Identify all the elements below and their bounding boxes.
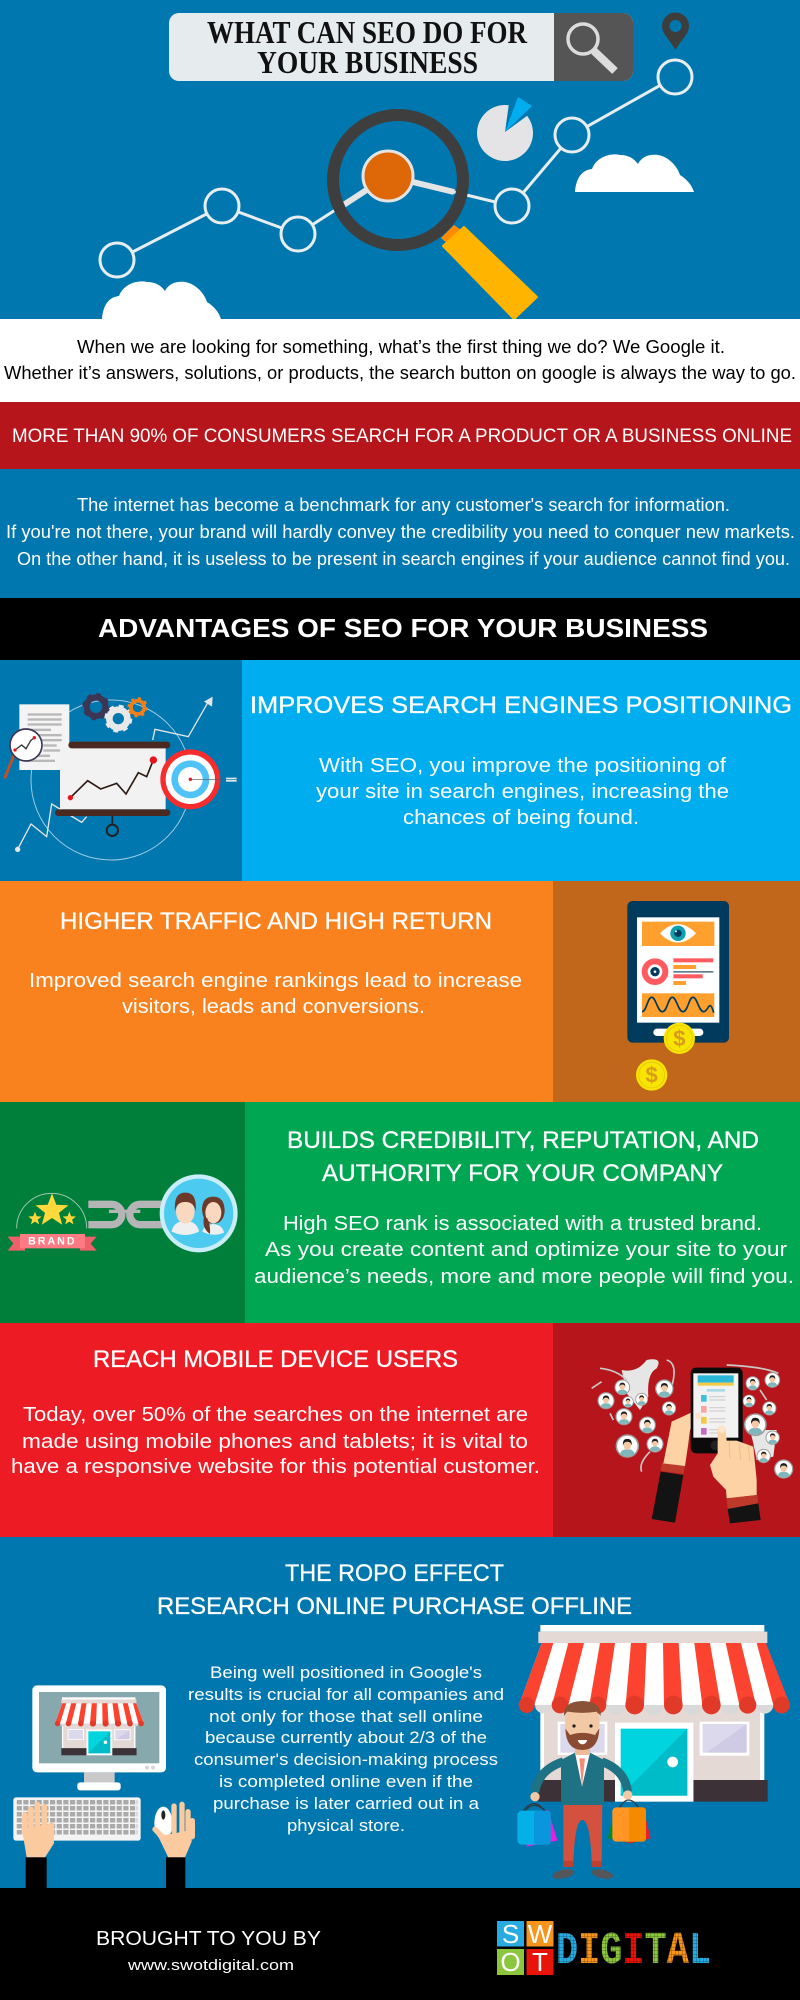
icon: pie chart (477, 96, 535, 161)
logo: SWOT Digital: W (528, 1919, 553, 1949)
icon: hands holding phone with user network (592, 1359, 793, 1523)
heading: ROPO effect: THE ROPO EFFECT (285, 1560, 504, 1587)
text: brought to you by: www.swotdigital.com (127, 1957, 294, 1974)
title: YOUR BUSINESS (257, 44, 478, 80)
logo: SWOT Digital: S (502, 1919, 519, 1949)
text block: traffic: Improved search engine rankings lead to increase (29, 970, 522, 992)
text block: traffic: visitors, leads and conversions. (122, 996, 425, 1018)
panel: ROPO effect (0, 1537, 800, 1888)
text block: credibility: audience’s needs, more and more people will find you. (254, 1266, 794, 1288)
text block: ROPO: not only for those that sell online (209, 1707, 483, 1726)
text block: ROPO: results is crucial for all companies and (188, 1685, 504, 1704)
text block: ROPO (188, 1663, 504, 1835)
text block: credibility: As you create content and optimize your site to your (265, 1239, 787, 1261)
icon: storefront (517, 1625, 790, 1881)
text block: mobile (11, 1404, 540, 1478)
text block: positioning: your site in search engines, increasing the (316, 781, 729, 803)
text block: mobile: have a responsive website for this potential customer. (11, 1456, 540, 1478)
panel: blue credibility text (0, 469, 800, 598)
panel: higher traffic (0, 881, 800, 1102)
heading: builds credibility: AUTHORITY FOR YOUR COMPANY (322, 1160, 723, 1187)
heading: higher traffic and high return: HIGHER TRAFFIC AND HIGH RETURN (60, 908, 492, 935)
heading: reach mobile device users: REACH MOBILE DEVICE USERS (93, 1346, 458, 1373)
icon: clouds (102, 154, 694, 319)
panel: intro text: Whether it’s answers, solutions, or products, the search button on google is always the way to go. (4, 363, 796, 383)
title: WHAT CAN SEO DO FOR (207, 14, 528, 50)
icon: brand chain to people: BRAND (28, 1236, 77, 1248)
panel: reach mobile users (0, 1323, 800, 1537)
text block: positioning (316, 755, 729, 829)
text block: mobile: made using mobile phones and tablets; it is vital to (22, 1431, 528, 1453)
text: brought to you by (96, 1928, 321, 1974)
heading: improves search engines positioning: IMPROVES SEARCH ENGINES POSITIONING (250, 692, 792, 719)
text block: positioning: With SEO, you improve the positioning of (319, 755, 726, 777)
logo: SWOT Digital: O (500, 1947, 521, 1977)
icon: computer with online store and hands (13, 1685, 192, 1888)
heading: builds credibility (287, 1127, 759, 1187)
text block: credibility (254, 1213, 794, 1288)
text block: ROPO: physical store. (287, 1816, 405, 1835)
panel: blue credibility text: The internet has become a benchmark for any customer's search for information. (77, 495, 730, 515)
text block: mobile: Today, over 50% of the searches on the internet are (23, 1404, 528, 1426)
heading: ROPO effect: RESEARCH ONLINE PURCHASE OFFLINE (157, 1593, 632, 1620)
panel: intro text (0, 319, 800, 402)
text block: ROPO: because currently about 2/3 of the (205, 1728, 487, 1747)
text block: ROPO: Being well positioned in Google's (210, 1663, 482, 1682)
panel: improves positioning (0, 660, 800, 881)
panel: blue credibility text: On the other hand, it is useless to be present in search engines if your audience cannot find you. (17, 549, 790, 569)
heading: advantages (0, 598, 800, 660)
icon: brand chain to people (8, 1174, 238, 1252)
logo: SWOT Digital: T (532, 1947, 548, 1977)
text block: ROPO: consumer's decision-making process (194, 1750, 498, 1769)
panel: hero header (0, 0, 800, 319)
logo: SWOT Digital (497, 1919, 712, 1977)
icon: shopper with bags (517, 1701, 651, 1881)
panel: red statistic banner (0, 402, 800, 469)
heading: advantages: ADVANTAGES OF SEO FOR YOUR BUSINESS (98, 613, 708, 643)
heading: builds credibility: BUILDS CREDIBILITY, REPUTATION, AND (287, 1127, 759, 1154)
panel: footer (0, 1888, 800, 2000)
panel: red statistic banner: MORE THAN 90% OF CONSUMERS SEARCH FOR A PRODUCT OR A BUSINESS ONLINE (12, 426, 792, 447)
chart line: rising trend (100, 60, 692, 277)
search bar title (169, 13, 633, 81)
logo: SWOT Digital: DIGITAL (556, 1927, 711, 1977)
heading: ROPO effect (157, 1560, 632, 1620)
icon: tablet with coins: $ (646, 1063, 658, 1088)
icon: tablet with coins (627, 901, 729, 1091)
text block: traffic (29, 970, 522, 1018)
title (207, 14, 528, 80)
panel: builds credibility (0, 1102, 800, 1323)
text: brought to you by: BROUGHT TO YOU BY (96, 1928, 321, 1950)
icon: map pin (662, 13, 689, 50)
text block: credibility: High SEO rank is associated with a trusted brand. (283, 1213, 762, 1235)
text block: ROPO: purchase is later carried out in a (213, 1794, 480, 1813)
text block: ROPO: is completed online even if the (219, 1772, 473, 1791)
icon: tablet with coins: $ (673, 1026, 685, 1051)
panel: intro text: When we are looking for something, what’s the first thing we do? We Google it. (77, 337, 725, 357)
icon: magnifying glass (333, 115, 537, 319)
panel: blue credibility text: If you're not there, your brand will hardly convey the credibility you need to conquer new markets. (6, 522, 795, 542)
icon: search magnifier (568, 24, 615, 71)
icon: presentation board with target (5, 695, 237, 860)
text block: positioning: chances of being found. (403, 807, 639, 829)
